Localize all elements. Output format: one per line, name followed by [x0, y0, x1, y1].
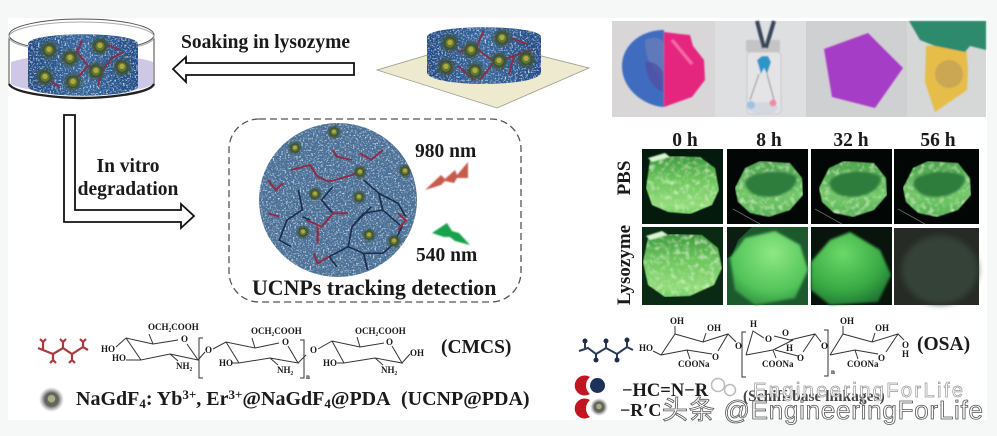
- icon: Schiff base linkage, CMCS and OSA: [575, 376, 605, 396]
- photo: hydrogel joined by tweezers in vial: [746, 21, 781, 114]
- formula: OSA structure: O: [902, 340, 909, 350]
- legend: UCNP@PDA formula: NaGdF: [76, 388, 139, 410]
- caption: UCNPs tracking detection: UCNPs tracking detection: [252, 275, 496, 300]
- formula: CMCS structure: HO: [101, 344, 115, 354]
- watermark: upper: EngineeringForLife: [753, 380, 963, 402]
- formula: OSA structure: O: [782, 328, 789, 338]
- formula: OSA structure: COONa: [762, 359, 794, 369]
- formula: CMCS structure: NH₂: [176, 361, 192, 371]
- formula: OSA structure: OH: [670, 316, 684, 326]
- panel: fluorescence PBS 56 h: [894, 149, 979, 224]
- heading: soaking in lysozyme: Soaking in lysozyme: [181, 32, 350, 53]
- formula: CMCS structure: [101, 322, 424, 381]
- formula: OSA structure: n: [831, 368, 835, 376]
- formula: CMCS structure: HO: [323, 358, 337, 368]
- formula: OSA structure: OH: [875, 323, 889, 333]
- legend: UCNP@PDA formula: 3+: [228, 387, 242, 402]
- column labels: time points: 0 h: [672, 130, 698, 151]
- photos: hydrogel samples: [612, 21, 986, 117]
- formula: OSA structure: H: [902, 349, 909, 359]
- column labels: time points: 8 h: [756, 130, 782, 151]
- formula: CMCS structure: O: [205, 345, 212, 355]
- formula: OSA structure: O: [765, 334, 772, 344]
- icon: green lightning bolt: [432, 223, 470, 245]
- formula: OSA structure: H: [786, 343, 793, 353]
- legend: UCNP@PDA formula: 4: [139, 396, 146, 411]
- arrow: degradation, down and right: [64, 115, 194, 228]
- panel: fluorescence PBS 32 h: [811, 149, 892, 224]
- panel: fluorescence lysozyme 8 h: [727, 227, 808, 305]
- row label: Lysozyme: Lysozyme: [614, 225, 635, 305]
- formula: OSA structure: H: [750, 319, 757, 329]
- formula: CMCS structure: O: [282, 337, 289, 347]
- formula: OSA structure: OH: [840, 316, 854, 326]
- icon: OSA chain: [579, 338, 633, 362]
- formula: OSA structure: COONa: [678, 359, 710, 369]
- hydrogel network circle: [258, 122, 418, 278]
- formula: CMCS structure: OCH₂COOH: [251, 326, 302, 336]
- legend: UCNP@PDA formula: @PDA: [331, 388, 391, 410]
- photo: yellow hydrogel held by green glove: [909, 21, 986, 112]
- icon: CMCS chain: [38, 339, 88, 363]
- formula: CMCS structure: O: [310, 345, 317, 355]
- panel: fluorescence lysozyme 0 h: [642, 227, 723, 305]
- formula: OSA structure: O: [821, 341, 828, 351]
- panel: UCNPs tracking detection: [229, 119, 521, 302]
- formula: CMCS structure: n: [306, 373, 310, 381]
- formula: OSA structure: O: [735, 341, 742, 351]
- arrow: soaking, pointing left: [173, 57, 354, 82]
- legend: second linkage: −R′C: [620, 400, 661, 420]
- formula: CMCS structure: HO: [112, 353, 126, 363]
- text: in vitro degradation: degradation: [78, 179, 179, 200]
- legend: UCNP@PDA formula: : Yb: [146, 388, 182, 410]
- formula: CMCS structure: OCH₂COOH: [355, 326, 406, 336]
- legend: UCNP@PDA formula: , Er: [196, 388, 229, 410]
- formula: CMCS structure: O: [386, 337, 393, 347]
- formula: OSA structure: O: [878, 353, 885, 363]
- icon: red lightning bolt: [425, 162, 468, 190]
- column labels: time points: 56 h: [920, 130, 956, 151]
- photo: blue and pink hydrogel: [622, 30, 705, 107]
- formula: OSA structure: O: [712, 352, 719, 362]
- formula: OSA structure: COONa: [847, 359, 879, 369]
- panel: fluorescence lysozyme 56 h: [894, 228, 979, 305]
- panel: fluorescence PBS 8 h: [727, 149, 808, 224]
- formula: CMCS structure: NH₂: [381, 365, 398, 375]
- legend: imine linkage: (Schiff-base linkages): [743, 388, 885, 405]
- photo: purple pentagon hydrogel: [824, 33, 903, 108]
- label: OSA: (OSA): [917, 334, 970, 355]
- label: 980 nm: 980 nm: [415, 141, 476, 162]
- text: in vitro degradation: In vitro: [96, 156, 160, 177]
- legend: UCNP@PDA formula: 3+: [182, 387, 196, 402]
- formula: OSA structure: [639, 316, 909, 377]
- column labels: time points: [672, 130, 956, 151]
- icon: linkage, CMCS and UCNP: [575, 398, 608, 418]
- watermark: lower: 头条 @EngineeringForLife: [662, 395, 983, 425]
- formula: CMCS structure: OH: [410, 348, 424, 358]
- label: CMCS: (CMCS): [441, 337, 511, 358]
- row label: PBS: PBS: [614, 161, 635, 195]
- legend: imine linkage: −HC=N−R: [622, 381, 708, 401]
- legend: UCNP@PDA formula: @NaGdF: [242, 388, 324, 410]
- formula: CMCS structure: HO: [219, 358, 233, 368]
- legend: UCNP@PDA formula: (UCNP@PDA): [401, 388, 530, 410]
- formula: OSA structure: HO: [639, 343, 653, 353]
- formula: CMCS structure: O: [181, 334, 188, 344]
- panel: fluorescence PBS 0 h: [642, 149, 723, 224]
- formula: CMCS structure: OCH₂COOH: [148, 322, 199, 332]
- formula: CMCS structure: NH₂: [277, 365, 294, 375]
- panel: fluorescence lysozyme 32 h: [811, 227, 892, 305]
- icon: UCNP@PDA particle: [39, 387, 64, 412]
- icon: hydrogel on plate: [377, 27, 589, 108]
- label: 540 nm: 540 nm: [416, 245, 477, 266]
- formula: OSA structure: OH: [707, 323, 721, 333]
- legend: UCNP@PDA formula: 4: [324, 396, 331, 411]
- formula: OSA structure: O: [797, 353, 804, 363]
- column labels: time points: 32 h: [833, 130, 869, 151]
- icon: petri dish with hydrogel soaking in lysozyme: [9, 19, 154, 98]
